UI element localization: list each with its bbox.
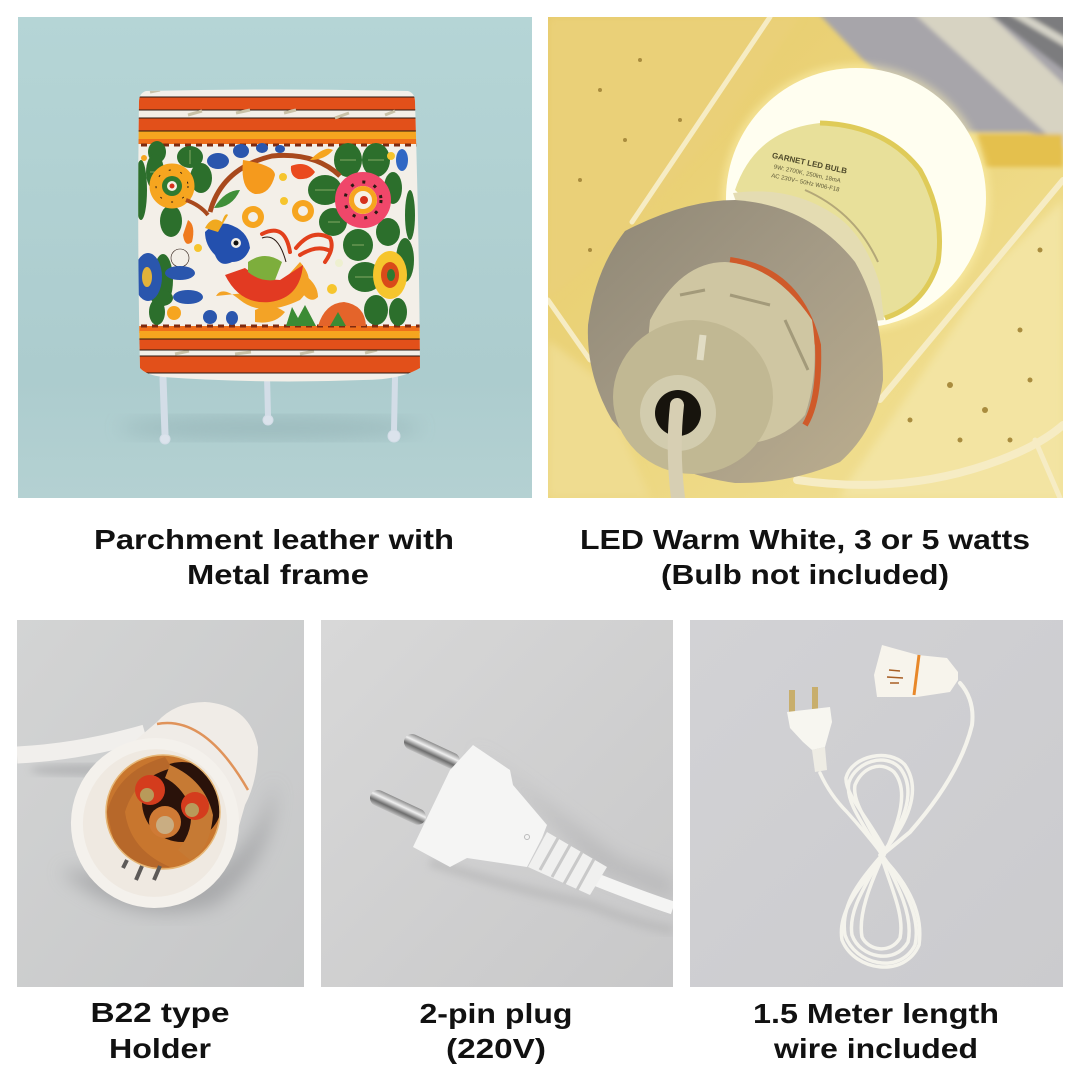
flower: blue [138,253,162,301]
perforation dots [578,58,1042,442]
stitches [150,90,395,354]
blue top motif [207,143,285,169]
pins [367,731,463,827]
caption: 2-pin plug: 2-pin plug [420,998,572,1029]
cable [675,405,678,498]
caption: LED warm white [580,524,1030,590]
hex nut [649,262,815,444]
plug strain relief [528,832,607,895]
flower: yellow [373,251,407,299]
ceiling background [815,10,1070,167]
caption: wire length: 1.5 Meter length [753,998,999,1029]
panel: LED bulb photo [548,10,1070,498]
frame wires [548,17,1063,498]
bulb glow [722,64,990,332]
caption: parchment leather [94,524,454,590]
holder cylinder [733,191,884,330]
plug body [413,745,547,867]
bulb base with text [735,123,940,318]
caption: wire length [753,998,999,1064]
panel: wire with holder photo [690,620,1063,987]
lower left shell motif [165,249,238,325]
caption: LED warm white: (Bulb not included) [661,559,949,590]
bottom borders [130,326,430,333]
caption: wire length: wire included [773,1033,978,1064]
flower: orange [156,170,188,202]
holder body [145,702,258,826]
caption: parchment leather: Parchment leather with [94,524,454,555]
peacock [205,214,332,323]
mini holder [874,645,958,697]
bulb base with text: AC 230V~ 50Hz W06-F18 [771,173,841,194]
panel: B22 holder photo [17,620,304,987]
caption: B22 holder: B22 type [90,997,230,1028]
orange ring [730,260,818,425]
leaves [135,141,415,326]
caption: parchment leather: Metal frame [187,559,369,590]
panel: parchment lamp photo [18,17,532,498]
caption: B22 holder: Holder [109,1033,211,1064]
holder copper insert [106,755,222,869]
leaf veins [150,150,384,277]
panel: 2-pin plug photo [321,620,673,987]
lamp legs [160,376,400,444]
plug shadow [470,745,673,900]
caption: 2-pin plug [420,998,572,1064]
flower: pink [342,179,384,221]
top borders [130,97,430,110]
grass and mound [286,305,316,326]
caption: B22 holder [90,997,230,1064]
round collar [588,200,883,483]
holder shadow [66,804,276,918]
lamp shadow [120,416,420,440]
small rosettes [141,149,408,320]
shade interior [548,17,1063,498]
cable [17,733,145,755]
coiled wire [820,683,972,967]
socket end [613,320,773,474]
holder cup [71,746,239,908]
orange motif and leaf [242,160,275,194]
lamp shade with floral painting [130,85,430,385]
arching stem [210,155,340,212]
holder slots [123,860,160,880]
caption: 2-pin plug: (220V) [446,1033,546,1064]
mini plug [787,687,832,772]
bulb base with text: 9W: 2700K, 250lm, 18mA [773,165,841,185]
bulb base with text: GARNET LED BULB [771,151,848,176]
cable [597,880,673,908]
caption: LED warm white: LED Warm White, 3 or 5 watts [580,524,1030,555]
glowing bulb [726,68,986,328]
